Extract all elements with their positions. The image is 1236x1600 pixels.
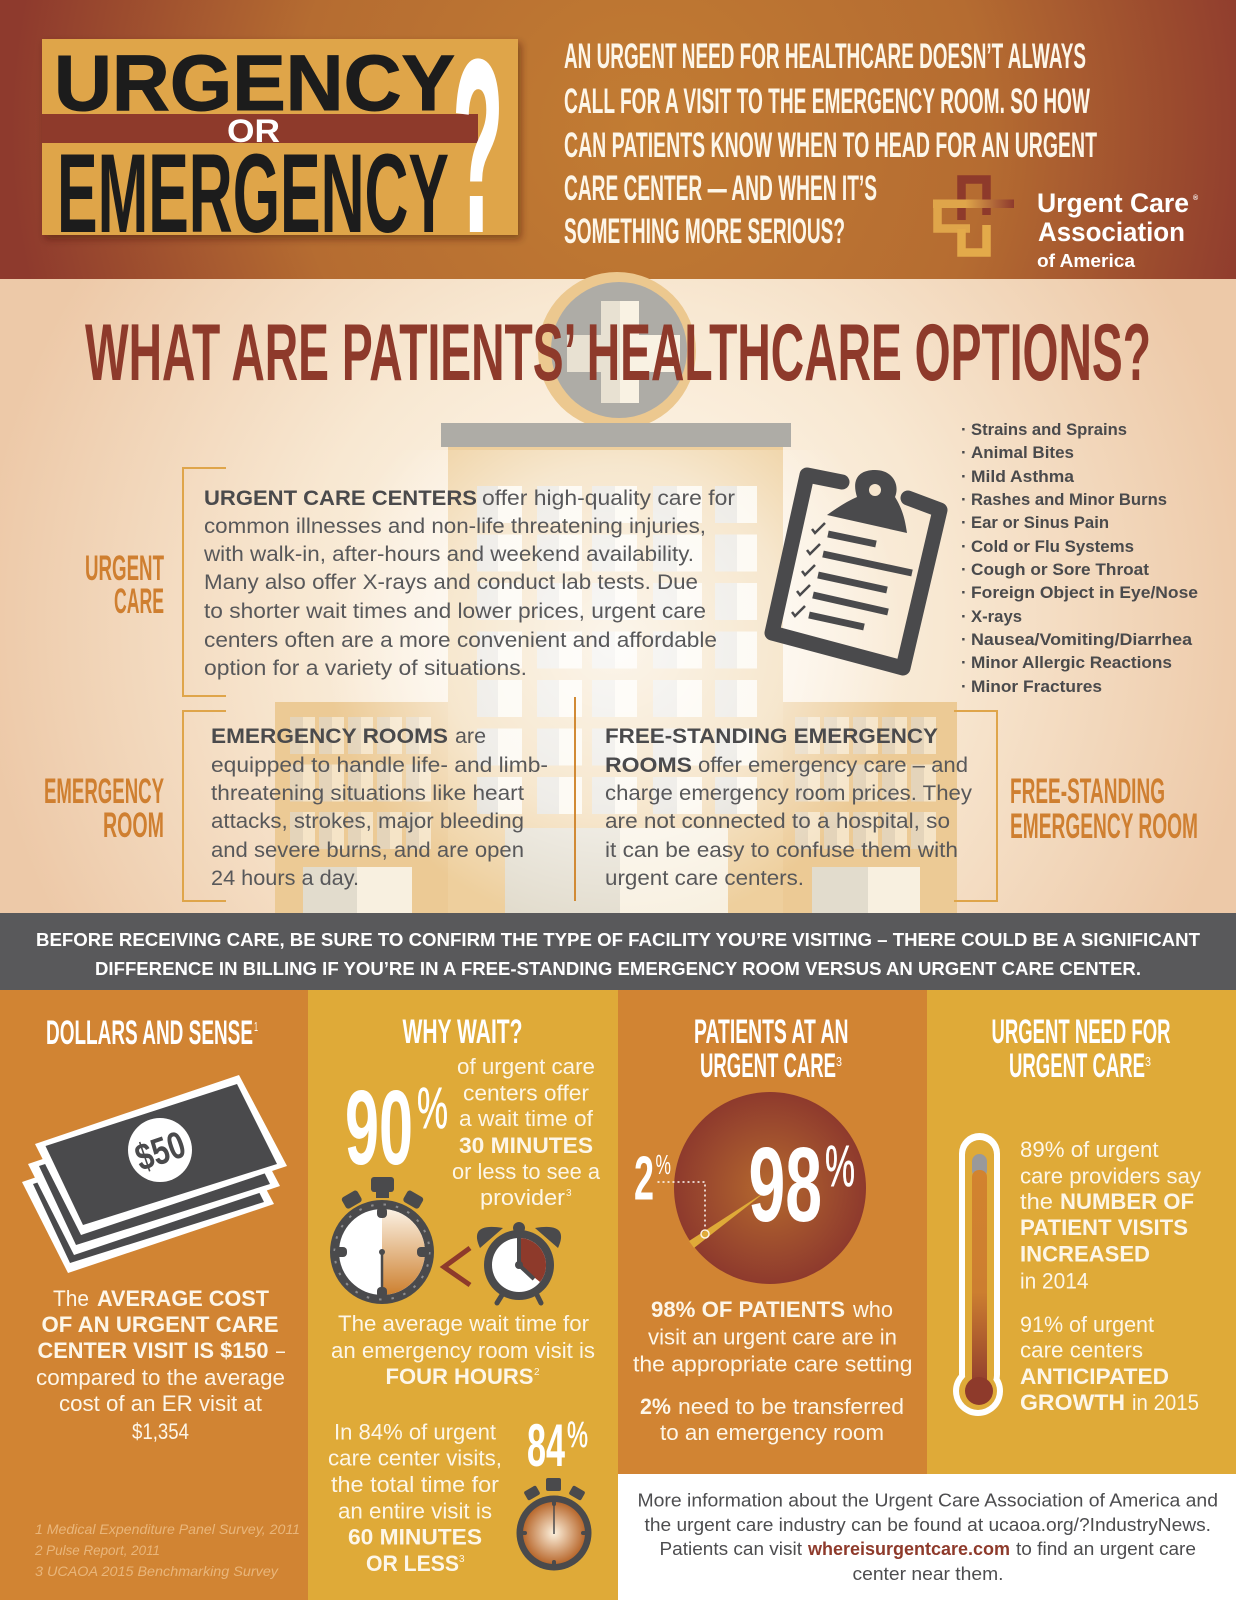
footnotes: 3 UCAOA 2015 Benchmarking Survey <box>35 1563 279 1579</box>
text: appropriate care setting: the appropriate care setting <box>633 1352 912 1376</box>
text: urgent care centers: Many also offer X-rays and conduct lab tests. Due <box>204 570 698 594</box>
heading: 3 <box>836 1054 842 1069</box>
text: free-standing emergency rooms: charge emergency room prices. They <box>605 781 972 805</box>
icon: stopwatch full <box>516 1478 592 1570</box>
chart: 98% dial: % <box>825 1134 855 1199</box>
text: appropriate care setting: 98% OF PATIENTS <box>651 1297 845 1322</box>
stat: 90%: % <box>417 1076 448 1141</box>
text: free-standing emergency rooms: are not connected to a hospital, so <box>605 809 950 833</box>
icon: alarm clock <box>477 1222 561 1303</box>
list: urgent care conditions: · <box>961 537 967 556</box>
label: urgent care: URGENT <box>85 549 164 588</box>
list: urgent care conditions: Mild Asthma <box>971 467 1075 486</box>
text: free-standing emergency rooms <box>605 724 972 890</box>
panel: header banner: ? <box>453 11 503 282</box>
text: patient visits stats: INCREASED <box>1020 1242 1150 1266</box>
list: urgent care conditions: · <box>961 583 967 602</box>
text: emergency rooms: EMERGENCY ROOMS <box>211 724 448 748</box>
text: 84% detail <box>328 1420 502 1576</box>
heading: 3 <box>1145 1054 1151 1069</box>
text: free-standing emergency rooms: ROOMS <box>605 753 692 777</box>
list: urgent care conditions: Cough or Sore Throat <box>971 560 1149 579</box>
text: emergency rooms: 24 hours a day. <box>211 866 359 890</box>
label: emergency room <box>44 772 164 845</box>
text: urgent care centers: common illnesses and non-life threatening injuries, <box>204 514 706 538</box>
logo: Urgent Care Association of America: Urgent Care <box>1037 188 1189 218</box>
intro text: SOMETHING MORE SERIOUS? <box>564 211 845 251</box>
panel: header banner <box>0 0 1236 282</box>
text: emergency rooms: threatening situations like heart <box>211 781 524 805</box>
text: patient visits stats: 91% of urgent <box>1020 1312 1154 1337</box>
text: 84% detail: 3 <box>459 1554 465 1565</box>
callout: confirm facility type <box>0 913 1236 990</box>
logo: Urgent Care Association of America: of America <box>1037 251 1136 271</box>
text: emergency rooms: attacks, strokes, major bleeding <box>211 809 524 833</box>
logo: Urgent Care Association of America: ® <box>1193 194 1199 202</box>
heading: PATIENTS AT AN <box>694 1013 848 1051</box>
label: urgent care: CARE <box>114 582 164 621</box>
text: patient visits stats: care centers <box>1020 1338 1143 1362</box>
label: free-standing emergency room <box>1010 772 1198 846</box>
text: emergency rooms: and severe burns, and are open <box>211 838 524 862</box>
heading: WHY WAIT? <box>402 1013 522 1051</box>
text: average cost: The <box>53 1286 89 1311</box>
text: average er wait: The average wait time for <box>338 1311 589 1336</box>
list: urgent care conditions: · <box>961 560 967 579</box>
text: patient visits stats: the <box>1020 1189 1053 1214</box>
list: urgent care conditions: Cold or Flu Systems <box>971 537 1134 556</box>
chart: 98% dial <box>634 1092 866 1284</box>
list: urgent care conditions: Foreign Object in Eye/Nose <box>971 583 1198 602</box>
text: patient visits stats: ANTICIPATED <box>1020 1364 1169 1389</box>
text: 84% detail: In 84% of urgent <box>334 1420 496 1444</box>
illustration: hospital building <box>275 272 965 913</box>
text: patient visits stats: in 2015 <box>1132 1390 1199 1415</box>
icon: stack of money <box>22 1075 287 1273</box>
text: urgent care centers: URGENT CARE CENTERS <box>204 486 477 510</box>
title: Urgency or Emergency? <box>42 11 518 282</box>
text: urgent care centers <box>203 486 735 680</box>
intro text <box>564 36 1097 251</box>
list: urgent care conditions: Strains and Sprains <box>971 420 1127 439</box>
text: urgent care centers: with walk-in, after-hours and weekend availability. <box>203 542 694 566</box>
text: 90% detail <box>452 1054 601 1210</box>
text: patient visits stats: 89% of urgent <box>1020 1137 1158 1162</box>
logo: Urgent Care Association of America <box>933 180 1199 271</box>
list: urgent care conditions: Minor Fractures <box>971 677 1102 696</box>
panel: healthcare options <box>0 272 1236 913</box>
list: urgent care conditions: · <box>961 443 967 462</box>
heading: URGENT CARE <box>700 1047 836 1085</box>
stat: 90%: 90 <box>345 1069 413 1187</box>
panel: more information: the urgent care industry can be found at ucaoa.org/?IndustryNews. <box>644 1514 1211 1535</box>
list: urgent care conditions: Minor Allergic Reactions <box>971 653 1172 672</box>
text: 90% detail: centers offer <box>463 1080 589 1106</box>
list: urgent care conditions: · <box>961 467 967 486</box>
text: emergency rooms <box>211 724 548 890</box>
text: average cost: CENTER VISIT IS $150 <box>38 1338 268 1363</box>
divider <box>574 697 576 901</box>
text: 84% detail: the total time for <box>331 1472 499 1497</box>
list: urgent care conditions: X-rays <box>971 607 1022 626</box>
list: urgent care conditions: · <box>961 677 967 696</box>
text: 90% detail: 3 <box>566 1188 572 1199</box>
intro text: CARE CENTER — AND WHEN IT’S <box>564 168 877 208</box>
text: average cost: OF AN URGENT CARE <box>42 1312 278 1337</box>
title: Urgency or Emergency?: EMERGENCY <box>57 131 449 256</box>
panel: urgent need for urgent care <box>927 990 1236 1474</box>
text: 84% detail: OR LESS <box>366 1551 459 1576</box>
heading: 1 <box>254 1019 258 1034</box>
panel: more information: center near them. <box>852 1563 1004 1584</box>
heading <box>992 1013 1170 1085</box>
text: free-standing emergency rooms: it can be easy to confuse them with <box>605 838 958 862</box>
panel: more information: Patients can visit <box>660 1538 802 1559</box>
text: 90% detail: a wait time of <box>459 1106 594 1131</box>
footnotes: 2 Pulse Report, 2011 <box>34 1542 160 1558</box>
chart: 98% dial: % <box>656 1149 671 1180</box>
icon: stack of money: $50 <box>130 1124 191 1180</box>
panel: why wait <box>308 990 618 1600</box>
heading <box>694 1013 848 1085</box>
panel: dollars and sense <box>0 990 308 1600</box>
footnotes <box>34 1521 300 1579</box>
text: average cost: cost of an ER visit at <box>59 1391 262 1416</box>
stat: 84%: % <box>567 1414 588 1455</box>
list: urgent care conditions: · <box>961 607 967 626</box>
icon: clipboard <box>772 470 940 668</box>
text: average cost: compared to the average <box>36 1365 285 1390</box>
text: 84% detail: 60 MINUTES <box>348 1524 482 1550</box>
footnotes: 1 Medical Expenditure Panel Survey, 2011 <box>35 1521 300 1537</box>
text: patient visits stats: NUMBER OF <box>1060 1189 1194 1214</box>
text: free-standing emergency rooms: urgent care centers. <box>605 866 804 890</box>
list: urgent care conditions <box>961 420 1198 696</box>
callout: confirm facility type: DIFFERENCE IN BILLING IF YOU’RE IN A FREE-STANDING EMERGENCY ROOM VERSUS AN URGENT CARE CENTER. <box>95 958 1141 979</box>
label: emergency room: EMERGENCY <box>44 772 164 811</box>
bracket: free-standing <box>954 711 997 901</box>
panel: more information: to find an urgent care <box>1016 1538 1196 1559</box>
list: urgent care conditions: · <box>961 513 967 532</box>
text: average er wait: an emergency room visit is <box>331 1338 595 1363</box>
text: 84% detail: care center visits, <box>328 1446 502 1470</box>
text: emergency rooms: are <box>455 724 486 748</box>
stat: 84%: 84 <box>527 1412 565 1479</box>
heading <box>46 1014 258 1052</box>
icon: thermometer <box>953 1133 1003 1416</box>
text: appropriate care setting <box>633 1297 912 1445</box>
text: appropriate care setting: who <box>852 1297 893 1322</box>
text: appropriate care setting: to an emergency room <box>660 1420 884 1445</box>
list: urgent care conditions: · <box>961 653 967 672</box>
text: average cost: – <box>276 1338 286 1363</box>
text: appropriate care setting: 2% <box>640 1394 671 1419</box>
text: free-standing emergency rooms: offer emergency care – and <box>698 753 968 777</box>
list: urgent care conditions: · <box>961 490 967 509</box>
text: patient visits stats <box>1020 1137 1201 1415</box>
list: urgent care conditions: Nausea/Vomiting/Diarrhea <box>971 630 1193 649</box>
bracket: emergency room <box>183 711 226 901</box>
text: average er wait: 2 <box>534 1367 540 1378</box>
text: appropriate care setting: visit an urgent care are in <box>648 1324 897 1350</box>
panel: patients at an urgent care <box>618 990 927 1474</box>
text: emergency rooms: equipped to handle life- and limb- <box>211 753 548 777</box>
text: appropriate care setting: need to be transferred <box>678 1394 904 1419</box>
logo: Urgent Care Association of America: Association <box>1038 217 1185 247</box>
title: Urgency or Emergency?: URGENCY <box>54 38 455 127</box>
icon: less than <box>444 1248 470 1285</box>
panel: more information: whereisurgentcare.com <box>807 1538 1010 1559</box>
bracket: urgent care <box>183 468 226 696</box>
list: urgent care conditions: · <box>961 420 967 439</box>
text: urgent care centers: to shorter wait times and lower prices, urgent care <box>204 599 706 623</box>
list: urgent care conditions: Animal Bites <box>971 443 1074 462</box>
text: 84% detail: an entire visit is <box>338 1498 492 1524</box>
text: patient visits stats: care providers say <box>1020 1164 1201 1188</box>
text: average cost: $1,354 <box>132 1419 189 1444</box>
text: urgent care centers: option for a variety of situations. <box>204 656 527 680</box>
text: patient visits stats: PATIENT VISITS <box>1020 1215 1188 1240</box>
text: average er wait <box>331 1311 595 1389</box>
text: free-standing emergency rooms: FREE-STANDING EMERGENCY <box>605 724 938 748</box>
panel: more information <box>618 1474 1236 1600</box>
text: 90% detail: 30 MINUTES <box>459 1133 593 1158</box>
text: 90% detail: or less to see a <box>452 1159 601 1184</box>
text: urgent care centers: offer high-quality care for <box>482 486 735 510</box>
list: urgent care conditions: · <box>961 630 967 649</box>
text: 90% detail: provider <box>480 1185 565 1210</box>
label: urgent care <box>85 549 164 621</box>
chart: 98% dial: 2 <box>634 1144 654 1214</box>
text: urgent care centers: centers often are a more convenient and affordable <box>204 628 717 652</box>
text: patient visits stats: GROWTH <box>1020 1390 1125 1415</box>
panel: more information: More information about the Urgent Care Association of America and <box>638 1490 1218 1510</box>
heading: DOLLARS AND SENSE <box>46 1014 253 1052</box>
text: average cost: AVERAGE COST <box>97 1286 270 1311</box>
title: Urgency or Emergency?: OR <box>227 113 280 149</box>
icon: stopwatch half <box>330 1177 434 1304</box>
text: average cost <box>36 1286 286 1444</box>
text: patient visits stats: in 2014 <box>1020 1268 1088 1294</box>
list: urgent care conditions: Ear or Sinus Pain <box>971 513 1109 532</box>
callout: confirm facility type: BEFORE RECEIVING CARE, BE SURE TO CONFIRM THE TYPE OF FACILITY YOU’RE VISITING – THERE COULD BE A SIGNIFICANT <box>36 929 1201 950</box>
label: emergency room: ROOM <box>103 806 164 845</box>
text: 90% detail: of urgent care <box>457 1054 595 1079</box>
chart: 98% dial: 98 <box>748 1126 822 1244</box>
list: urgent care conditions: Rashes and Minor Burns <box>971 490 1167 509</box>
text: average er wait: FOUR HOURS <box>386 1364 534 1389</box>
